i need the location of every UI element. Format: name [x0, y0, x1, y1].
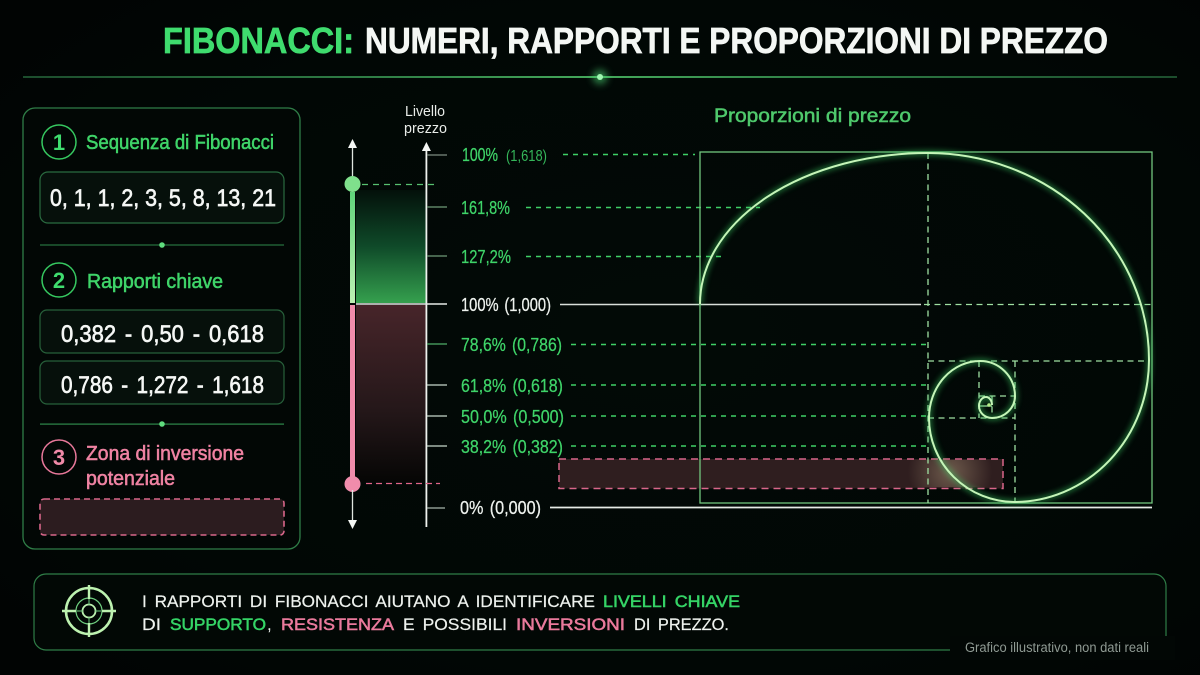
header divider: [23, 70, 1177, 84]
section 1: Fibonacci sequence: 1: [53, 130, 65, 155]
section 3: reversal zone: Zona di inversione: [86, 443, 244, 465]
golden rectangle grid: [700, 152, 1152, 503]
section 2: key ratios: 0,382 - 0,50 - 0,618: [61, 321, 264, 348]
takeaway text: E POSSIBILI: [403, 615, 507, 634]
green range fill: [356, 190, 426, 303]
spiral glow: [700, 153, 1149, 502]
level labels: [460, 145, 564, 518]
disclaimer note: [950, 636, 1175, 660]
level labels: 100% (1,000): [461, 295, 551, 315]
level labels: 61,8% (0,618): [461, 376, 563, 396]
range arrow up: [344, 139, 436, 303]
section 2: key ratios: Rapporti chiave: [87, 271, 223, 293]
price axis with ranges: [344, 103, 447, 529]
takeaway text: DI PREZZO.: [634, 615, 729, 634]
takeaway text: ,: [267, 615, 272, 634]
title: FIBONACCI:: [163, 20, 354, 61]
axis title: Livello: [405, 103, 445, 120]
level labels: 50,0% (0,500): [461, 407, 564, 427]
takeaway text: LIVELLI CHIAVE: [603, 592, 740, 611]
level labels: (1,618): [506, 148, 547, 165]
title: NUMERI, RAPPORTI E PROPORZIONI DI PREZZO: [365, 20, 1108, 61]
section 2: key ratios: 0,786 - 1,272 - 1,618: [61, 372, 264, 399]
takeaway text: [142, 592, 740, 634]
axis ticks: [356, 155, 447, 508]
axis title: prezzo: [404, 120, 447, 137]
takeaway text: SUPPORTO: [170, 615, 266, 634]
level lines: [526, 154, 1152, 508]
section 3: reversal zone: potenziale: [86, 468, 175, 490]
level labels: 78,6% (0,786): [461, 335, 562, 355]
takeaway text: I RAPPORTI DI FIBONACCI AIUTANO A IDENTIFICARE: [142, 592, 595, 611]
range arrow down: [344, 305, 440, 529]
disclaimer note: Grafico illustrativo, non dati reali: [965, 640, 1149, 655]
red range fill: [356, 305, 426, 482]
chart heading: Proporzioni di prezzo: [714, 106, 911, 127]
panel: left summary: [23, 108, 300, 549]
section 1: Fibonacci sequence: 0, 1, 1, 2, 3, 5, 8, 13, 21: [50, 185, 276, 212]
spiral curve: [700, 153, 1149, 502]
level labels: 38,2% (0,382): [461, 437, 563, 457]
section 3: reversal zone: [40, 440, 284, 535]
fibonacci spiral chart: [559, 152, 1152, 503]
section 2: key ratios: 2: [53, 268, 65, 293]
level labels: 161,8%: [461, 198, 510, 218]
section 1: Fibonacci sequence: [40, 125, 284, 223]
takeaway text: INVERSIONI: [516, 615, 625, 634]
potential reversal zone: [559, 459, 1003, 488]
level labels: 100%: [462, 145, 498, 165]
section 1: Fibonacci sequence: Sequenza di Fibonacci: [86, 132, 274, 154]
takeaway text: RESISTENZA: [281, 615, 395, 634]
section 2: key ratios: [40, 263, 284, 404]
axis title: [404, 103, 447, 137]
panel: bottom takeaway: [34, 574, 1166, 650]
takeaway text: DI: [142, 615, 161, 634]
level labels: 127,2%: [461, 247, 511, 267]
vertical price axis: [422, 142, 431, 527]
level labels: 0% (0,000): [460, 498, 541, 518]
icon: target: [62, 585, 116, 637]
section 3: reversal zone: 3: [53, 445, 65, 470]
